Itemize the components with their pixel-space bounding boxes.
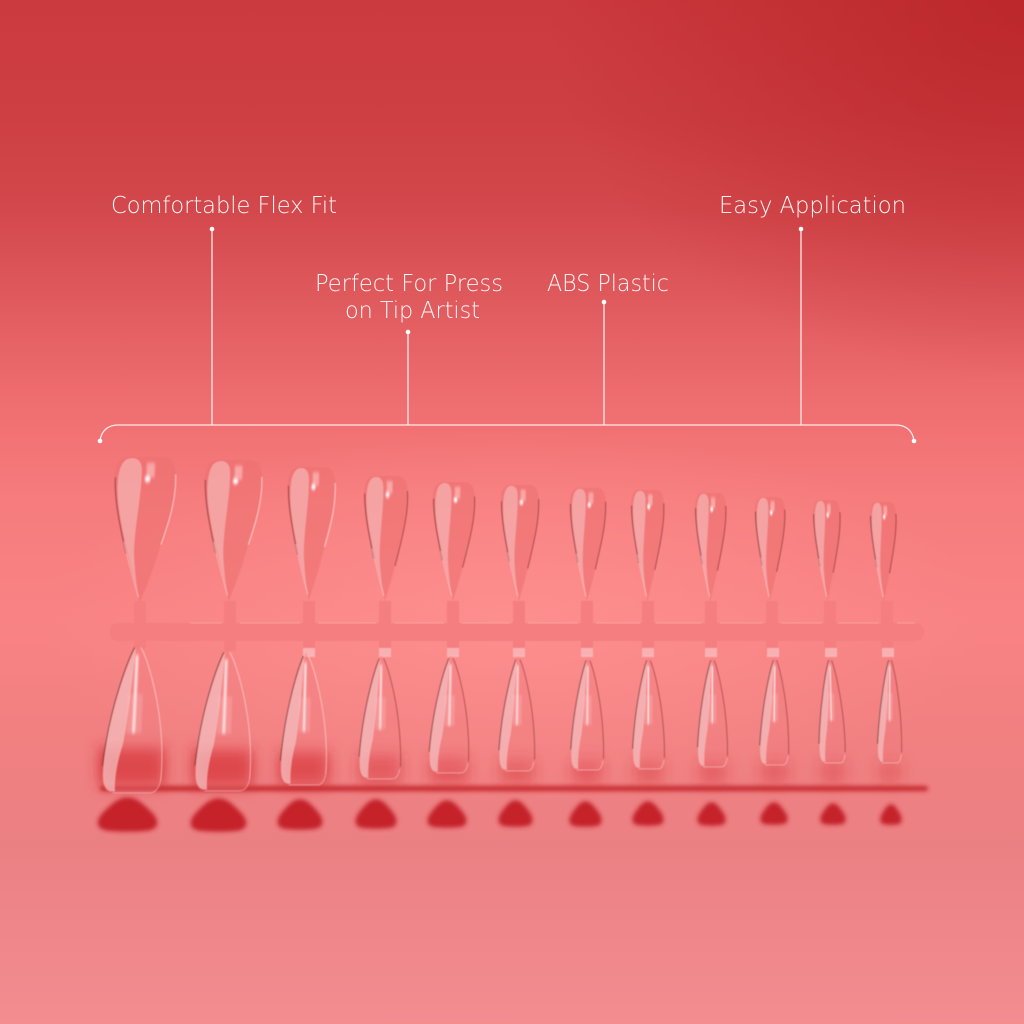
upper row of nail tips	[109, 457, 897, 603]
blurred floor shadows behind nail bases	[100, 748, 901, 786]
callout: Comfortable Flex Fit	[111, 193, 337, 425]
callout: Perfect For Press on Tip Artist	[315, 271, 503, 425]
lower row of nail tips	[101, 643, 902, 793]
callout: Easy Application: Easy Application	[719, 193, 906, 219]
callout: Perfect For Press on Tip Artist: on Tip Artist	[345, 298, 480, 324]
callout: ABS Plastic: ABS Plastic	[547, 271, 669, 297]
callout: Comfortable Flex Fit: Comfortable Flex Fit	[111, 193, 337, 219]
triangular tip shadows	[98, 797, 902, 832]
callout: Easy Application	[719, 193, 906, 425]
callout: Perfect For Press on Tip Artist: Perfect For Press	[315, 271, 503, 297]
bracket connecting all callouts	[98, 425, 916, 443]
long comb shadow	[100, 786, 928, 791]
callout: ABS Plastic	[547, 271, 669, 425]
comb carrier bar with stems	[110, 601, 924, 657]
